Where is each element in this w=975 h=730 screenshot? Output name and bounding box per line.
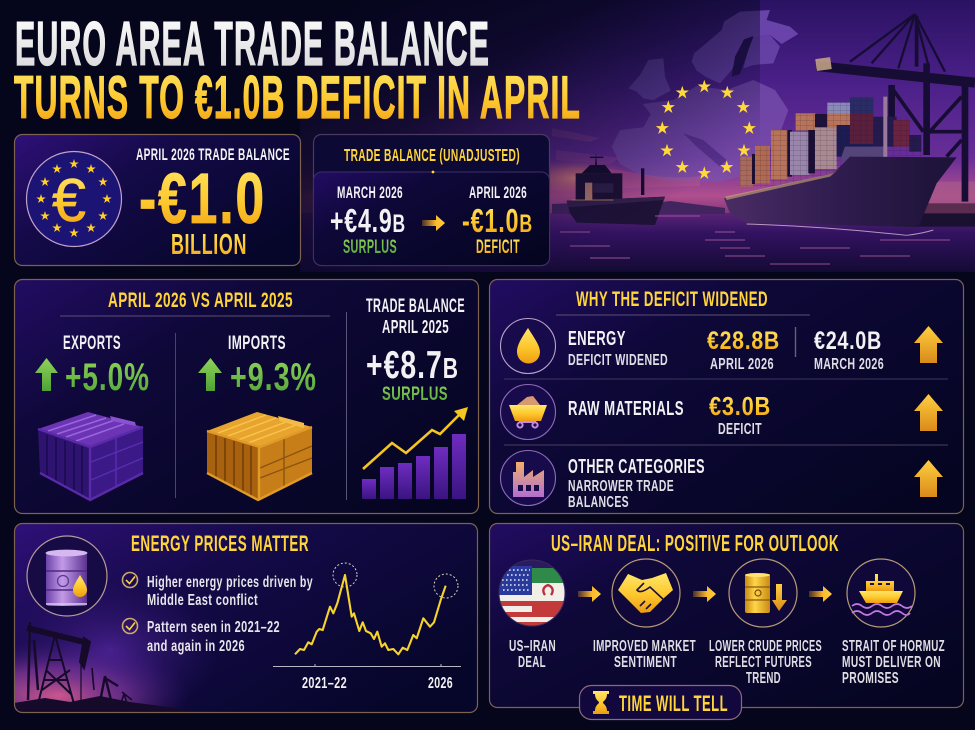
step 1: flag — [499, 560, 565, 671]
April 2026: DEFICIT — [476, 237, 520, 258]
quay — [918, 182, 975, 227]
row: other categories: NARROWER TRADE — [568, 478, 674, 495]
heading: WHY THE DEFICIT WIDENED — [576, 288, 768, 311]
step 2: handshake: IMPROVED MARKET — [593, 638, 696, 655]
panel: US-Iran deal — [490, 524, 964, 720]
step 2: handshake — [593, 559, 696, 671]
heading: ENERGY PRICES MATTER — [131, 531, 309, 556]
panel: April 2026 vs April 2025 — [14, 280, 478, 514]
row: energy: €24.0B — [814, 327, 882, 355]
exports: +5.0% — [65, 356, 150, 399]
far shore — [552, 201, 725, 214]
row: energy — [500, 318, 943, 374]
heading: TRADE BALANCE (UNADJUSTED) — [344, 145, 520, 165]
icon: mine cart — [509, 396, 547, 428]
checklist: Pattern seen in 2021–22 — [147, 619, 280, 636]
trade balance April 2025: +€8.7B — [366, 344, 459, 387]
icon: euro coin — [26, 152, 122, 246]
title — [14, 10, 581, 131]
April 2026 — [462, 184, 533, 258]
panel: energy prices matter — [0, 524, 478, 730]
panel: unadjusted trade balance — [314, 134, 550, 266]
row: other categories: OTHER CATEGORIES — [568, 455, 705, 478]
step 4: Strait of Hormuz: PROMISES — [842, 670, 899, 687]
panel: April 2026 trade balance — [14, 134, 300, 266]
crane tag — [815, 57, 832, 71]
icon: barrel — [27, 536, 107, 616]
trade balance April 2025 — [362, 295, 468, 499]
chart: rising bars — [362, 407, 468, 499]
row: other categories — [500, 450, 943, 511]
row: raw materials: DEFICIT — [718, 421, 762, 438]
row: energy: €28.8B — [707, 327, 780, 355]
row: energy: DEFICIT WIDENED — [568, 352, 668, 369]
row: energy: APRIL 2026 — [710, 356, 774, 373]
icon: orange container — [207, 412, 312, 500]
imports — [198, 332, 317, 500]
icon: pumpjack silhouette — [27, 622, 132, 706]
step 1: flag: DEAL — [518, 654, 546, 671]
step 3: lower crude — [709, 559, 822, 687]
imports: +9.3% — [230, 356, 317, 399]
EU star circle — [656, 80, 756, 179]
small cargo ship — [567, 153, 665, 225]
chart: energy price line — [273, 563, 461, 692]
exports — [35, 332, 150, 500]
title: EURO AREA TRADE BALANCE — [15, 10, 490, 79]
step 3: lower crude: LOWER CRUDE PRICES — [709, 638, 822, 655]
step 2: handshake: SENTIMENT — [614, 654, 677, 671]
hero illustration: port at sunset — [300, 0, 975, 272]
March 2026 — [330, 184, 406, 258]
arrow — [578, 586, 601, 602]
checklist: Higher energy prices driven by — [147, 574, 313, 591]
arrow — [693, 586, 716, 602]
callout: time will tell: TIME WILL TELL — [619, 691, 728, 716]
row: energy: MARCH 2026 — [814, 356, 884, 373]
icon: factory — [513, 462, 544, 497]
label: APRIL 2026 TRADE BALANCE — [136, 146, 290, 164]
row: energy: ENERGY — [568, 327, 626, 350]
arrow — [809, 586, 832, 602]
icon: hourglass — [593, 691, 609, 714]
April 2026: APRIL 2026 — [469, 184, 527, 202]
step 4: Strait of Hormuz — [842, 559, 945, 687]
icon: purple container — [38, 412, 143, 500]
March 2026: +€4.9B — [330, 202, 406, 239]
step 1: flag: US–IRAN — [509, 638, 556, 655]
March 2026: SURPLUS — [343, 237, 397, 258]
large container ship — [724, 97, 957, 235]
comparison box — [314, 171, 550, 266]
trade balance April 2025: TRADE BALANCE — [366, 295, 465, 317]
trade balance April 2025: SURPLUS — [382, 383, 448, 405]
big number: -€1.0 — [139, 160, 266, 239]
checklist: Middle East conflict — [147, 592, 258, 609]
checklist — [122, 572, 313, 655]
callout: time will tell — [580, 686, 742, 720]
checklist: and again in 2026 — [147, 638, 245, 655]
map of Europe — [612, 10, 798, 183]
chart: energy price line: 2026 — [428, 675, 453, 692]
icon: drop — [517, 328, 540, 364]
step 3: lower crude: REFLECT FUTURES — [715, 654, 812, 671]
trade balance April 2025: APRIL 2025 — [382, 316, 449, 337]
imports: IMPORTS — [228, 332, 286, 354]
heading: APRIL 2026 VS APRIL 2025 — [108, 289, 293, 312]
chart: energy price line: 2021–22 — [302, 675, 347, 692]
panel: why the deficit widened — [490, 280, 964, 514]
sunset glow and clouds — [550, 128, 700, 192]
row: raw materials: €3.0B — [709, 391, 771, 421]
crane — [817, 14, 975, 202]
April 2026: -€1.0B — [462, 202, 533, 239]
row: raw materials: RAW MATERIALS — [568, 397, 684, 420]
step 3: lower crude: TREND — [746, 670, 781, 687]
exports: EXPORTS — [63, 332, 121, 354]
row: raw materials — [500, 384, 943, 440]
unit: BILLION — [171, 229, 247, 261]
row: other categories: BALANCES — [568, 494, 629, 511]
March 2026: MARCH 2026 — [337, 184, 403, 202]
icon: euro coin: € — [52, 167, 88, 234]
arrow — [422, 215, 445, 231]
water reflections — [560, 216, 950, 264]
